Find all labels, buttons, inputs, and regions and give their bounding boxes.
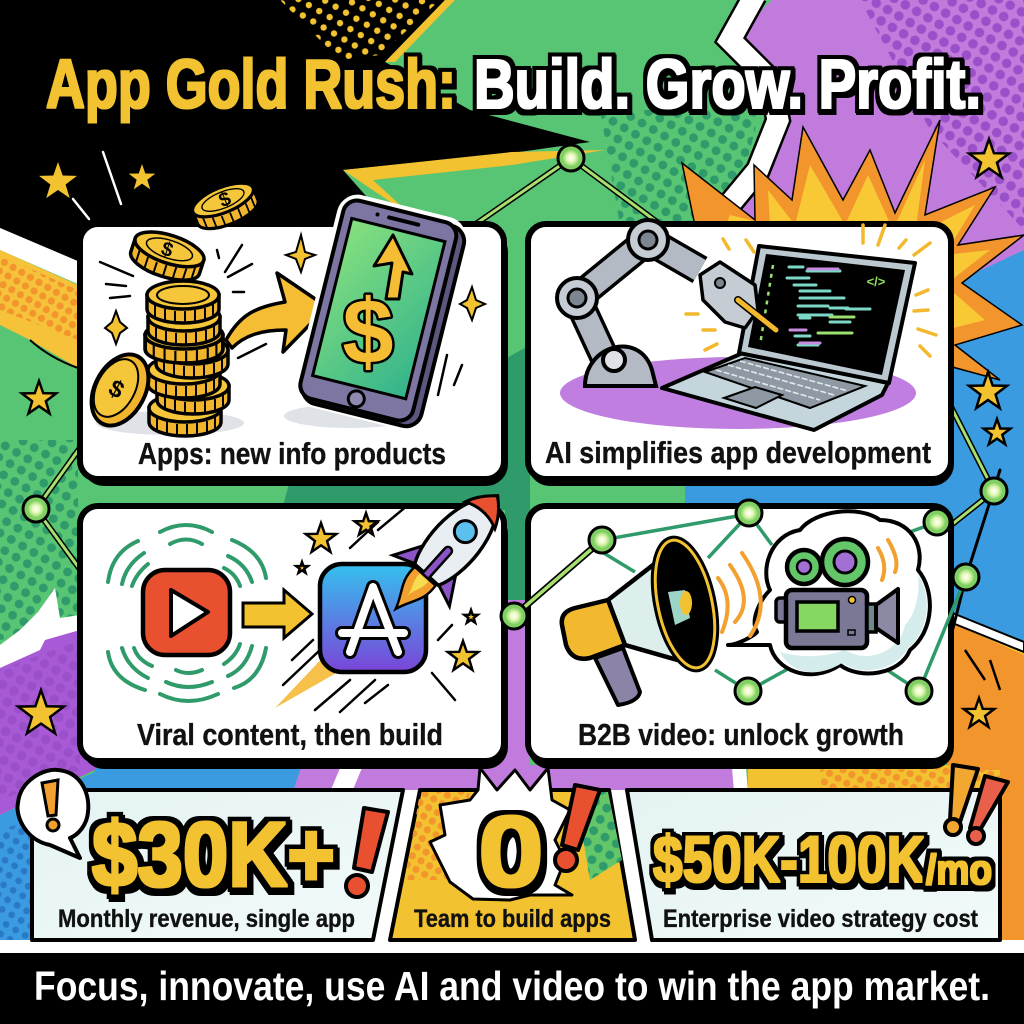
big number: $50K-100K <box>653 822 925 896</box>
stat panel: enterprise video cost <box>627 765 1008 940</box>
icon: signal arcs <box>108 525 266 701</box>
icon: red exclamation <box>354 808 388 872</box>
panel: viral content then build <box>80 470 526 769</box>
icon: laptop with code <box>662 246 915 430</box>
icon: video play button <box>143 570 230 655</box>
icon: coin stack: $ <box>216 188 234 212</box>
arrow: coins to phone <box>226 273 327 352</box>
label: Team to build apps <box>414 905 611 933</box>
caption: AI simplifies app development <box>545 435 931 470</box>
icon: coin stack: $ <box>104 375 129 405</box>
icon: pencil <box>738 300 778 332</box>
icon: sparkles <box>105 235 485 344</box>
caption: Viral content, then build <box>137 717 443 752</box>
title <box>46 45 981 123</box>
star: top left small <box>129 164 155 189</box>
sound waves <box>718 540 896 636</box>
per month unit: /mo <box>926 846 992 893</box>
pencil body <box>738 300 776 330</box>
icon: coin stack: $ <box>158 238 176 262</box>
icon: phone with dollar <box>284 196 468 430</box>
icon: thought cloud <box>728 511 930 674</box>
motion lines <box>283 505 455 712</box>
caption: B2B video: unlock growth <box>578 717 904 752</box>
caption: Apps: new info products <box>138 436 446 471</box>
panel: B2B video unlock growth <box>528 506 966 769</box>
white burst <box>430 768 572 900</box>
icon: laptop with code: </> <box>867 274 886 289</box>
spark marks <box>686 225 936 356</box>
exclamation dot <box>555 849 577 871</box>
star: top right <box>969 139 1009 177</box>
title: App Gold Rush: <box>46 45 456 123</box>
network lines in card <box>602 514 966 691</box>
big zero: 0 <box>478 796 544 908</box>
network nodes <box>23 145 1007 704</box>
stars around app <box>296 513 478 670</box>
icon: phone with dollar: $ <box>342 281 394 383</box>
icon: coin stack <box>80 176 262 436</box>
icon: rocket <box>368 470 526 634</box>
footer bar <box>0 953 1024 1024</box>
star: right small <box>984 419 1010 444</box>
explosion starburst <box>682 120 1024 380</box>
gaps between stat panels <box>373 790 652 945</box>
white strip under stats <box>0 940 1024 954</box>
icon: speed trail <box>275 650 345 708</box>
star: top left large <box>39 162 77 198</box>
stat panel: team to build apps <box>390 768 635 940</box>
icon: video camera <box>776 539 898 648</box>
network connector lines <box>36 158 1000 640</box>
purple floor ellipse <box>560 357 916 429</box>
star: lower left <box>18 690 64 733</box>
icon: double exclamation <box>945 765 1008 844</box>
panel: apps new info products <box>80 176 508 486</box>
icon: speech bubble exclamation <box>17 770 88 858</box>
icon: red exclamation <box>562 785 600 850</box>
icon: app store tile <box>320 564 426 672</box>
arrow: video to app <box>243 590 312 638</box>
big number: $30K+ <box>92 804 335 906</box>
stat panel: monthly revenue <box>32 790 403 940</box>
star: left <box>22 381 56 414</box>
label: Monthly revenue, single app <box>58 905 355 933</box>
label: Enterprise video strategy cost <box>663 905 979 933</box>
star: right large <box>969 372 1007 408</box>
exclamation dot <box>346 875 368 897</box>
icon: megaphone <box>562 535 725 705</box>
star: lower right <box>964 698 994 727</box>
motion lines <box>100 245 462 395</box>
sparkle lines top left <box>73 152 121 219</box>
panel: AI simplifies app development <box>528 220 954 486</box>
icon: robot arm <box>557 220 758 386</box>
